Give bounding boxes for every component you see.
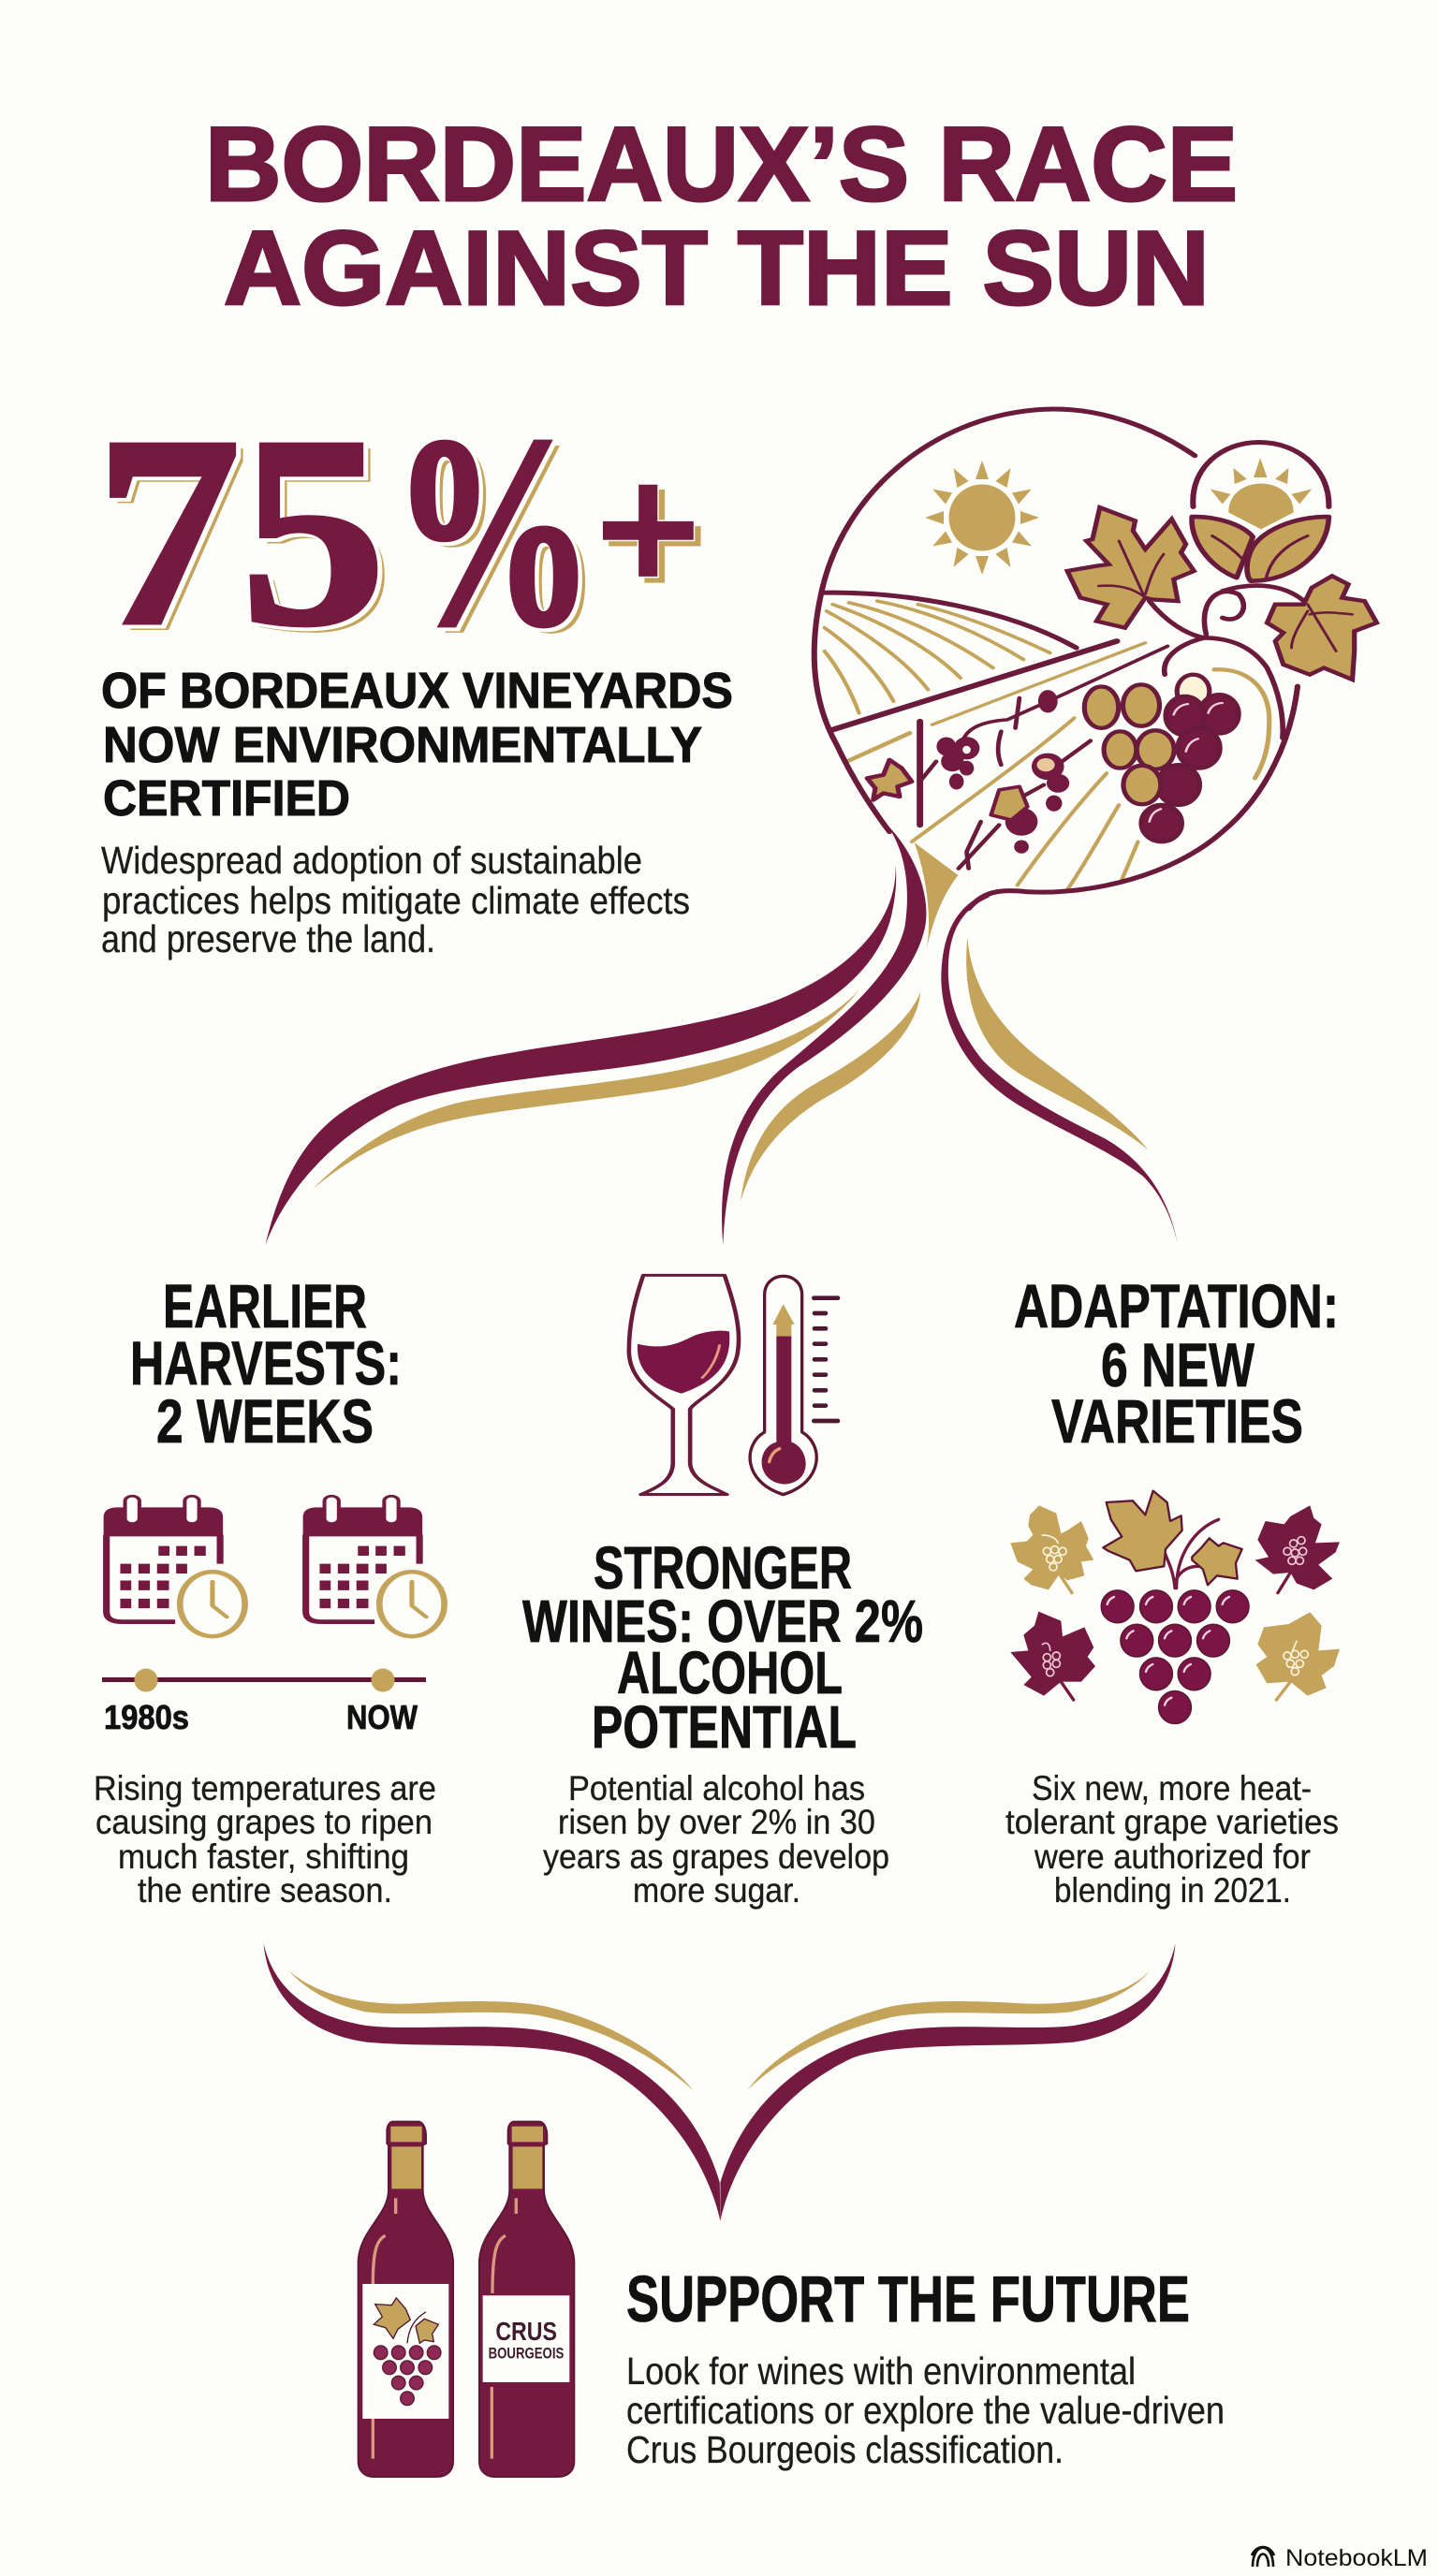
grape cluster — [1101, 1590, 1249, 1723]
stat heading: NOW ENVIRONMENTALLY — [103, 717, 702, 773]
right grape leaf — [1267, 576, 1377, 680]
column 2 heading: stronger wines: STRONGER — [594, 1534, 852, 1602]
timeline 1980s to now: 1980s — [104, 1698, 189, 1736]
icon: five grape leaves and grape bunch — [1010, 1491, 1340, 1723]
column 3 heading: adaptation: 6 NEW — [1101, 1330, 1255, 1399]
timeline 1980s to now — [102, 1668, 426, 1736]
column 2 body text — [543, 1769, 889, 1910]
big stat: 75%+ — [95, 381, 708, 687]
big stat: 75%+: % — [391, 381, 595, 681]
big stat: 75%+: 75 — [98, 383, 389, 683]
wine leaf top right — [1255, 1505, 1340, 1593]
column 1 heading: earlier harvests — [130, 1271, 402, 1456]
stat body text — [101, 839, 690, 960]
stat body text: Widespread adoption of sustainable — [101, 839, 642, 882]
column 2 heading: stronger wines — [522, 1534, 923, 1761]
support heading: SUPPORT THE FUTURE — [626, 2262, 1190, 2335]
vine sprig clusters — [867, 690, 1069, 854]
hillside vine rows — [825, 601, 1145, 888]
column 2 heading: stronger wines: ALCOHOL — [617, 1639, 843, 1706]
column 1 body text: Rising temperatures are — [94, 1769, 436, 1808]
column 1 body text: much faster, shifting — [118, 1837, 409, 1876]
big stat: 75%+: 75 — [103, 387, 393, 687]
grape bunch — [1084, 675, 1239, 842]
NotebookLM logo: NotebookLM — [1285, 2545, 1428, 2571]
big stat: 75%+: 75 — [95, 381, 386, 681]
circle outline — [814, 409, 1298, 909]
centre leaves with stems — [1103, 1491, 1242, 1588]
support body text: Look for wines with environmental — [626, 2349, 1136, 2393]
column 2 body text: risen by over 2% in 30 — [558, 1803, 875, 1841]
stat body text: and preserve the land. — [101, 917, 435, 960]
support body text — [626, 2349, 1225, 2471]
column 3 heading: adaptation: ADAPTATION: — [1014, 1271, 1339, 1340]
vine stems and tendril — [1150, 586, 1308, 739]
bottle with grape label — [359, 2122, 453, 2477]
icon: thermometer — [750, 1276, 838, 1495]
column 1 body text: the entire season. — [138, 1871, 392, 1910]
icon: wine glass — [629, 1275, 739, 1495]
column 1 heading: earlier harvests: HARVESTS: — [130, 1328, 402, 1398]
support body text: Crus Bourgeois classification. — [626, 2428, 1064, 2471]
stat body text: practices helps mitigate climate effects — [102, 879, 690, 922]
bottle with Crus Bourgeois label: BOURGEOIS — [489, 2344, 564, 2362]
gold leaf top left — [1010, 1505, 1093, 1593]
large grape leaf — [1067, 507, 1194, 628]
stat heading — [101, 663, 733, 827]
title: AGAINST THE SUN — [224, 210, 1210, 327]
column 3 body text: blending in 2021. — [1054, 1871, 1291, 1910]
bottle with Crus Bourgeois label — [479, 2122, 574, 2477]
column 3 body text: were authorized for — [1034, 1837, 1311, 1876]
gold curve beside grapes — [1214, 669, 1269, 778]
column 3 heading: adaptation — [1014, 1271, 1339, 1456]
column 1 heading: earlier harvests: EARLIER — [163, 1271, 367, 1340]
wine leaf bottom left — [1010, 1612, 1095, 1700]
support body text: certifications or explore the value-driven — [626, 2389, 1225, 2432]
column 1 heading: earlier harvests: 2 WEEKS — [156, 1386, 374, 1456]
column 3 body text: Six new, more heat- — [1032, 1769, 1312, 1808]
column 3 body text: tolerant grape varieties — [1005, 1803, 1339, 1841]
column 2 heading: stronger wines: POTENTIAL — [592, 1693, 857, 1761]
column 2 body text: years as grapes develop — [543, 1837, 889, 1876]
stat heading: CERTIFIED — [103, 770, 350, 827]
column 1 body text: causing grapes to ripen — [95, 1803, 433, 1841]
column 2 heading: stronger wines: WINES: OVER 2% — [522, 1588, 923, 1655]
icon: calendar and clock now — [303, 1496, 445, 1636]
lower converging swooshes — [263, 1943, 1175, 2221]
column 3 body text — [1005, 1769, 1339, 1910]
sun icon — [925, 461, 1039, 575]
title — [205, 106, 1238, 327]
vineyard illustration circle — [814, 409, 1377, 909]
gold leaf bottom right — [1256, 1612, 1340, 1700]
big stat: 75%+: + — [601, 432, 708, 637]
upper flowing swooshes — [265, 824, 1178, 1245]
small sun emblem with two leaves — [1192, 442, 1328, 581]
icon: calendar and clock 1980s — [104, 1496, 245, 1636]
column 2 body text: Potential alcohol has — [568, 1769, 865, 1808]
big stat: 75%+: % — [394, 383, 598, 683]
title: BORDEAUX’S RACE — [205, 106, 1238, 223]
big stat: 75%+: + — [594, 426, 701, 631]
column 2 body text: more sugar. — [633, 1871, 800, 1910]
timeline 1980s to now: NOW — [346, 1698, 418, 1736]
big stat: 75%+: % — [399, 387, 603, 687]
bottle with Crus Bourgeois label: CRUS — [495, 2317, 557, 2346]
stat heading: OF BORDEAUX VINEYARDS — [101, 663, 733, 719]
column 3 heading: adaptation: VARIETIES — [1051, 1386, 1303, 1456]
column 1 body text — [94, 1769, 436, 1910]
